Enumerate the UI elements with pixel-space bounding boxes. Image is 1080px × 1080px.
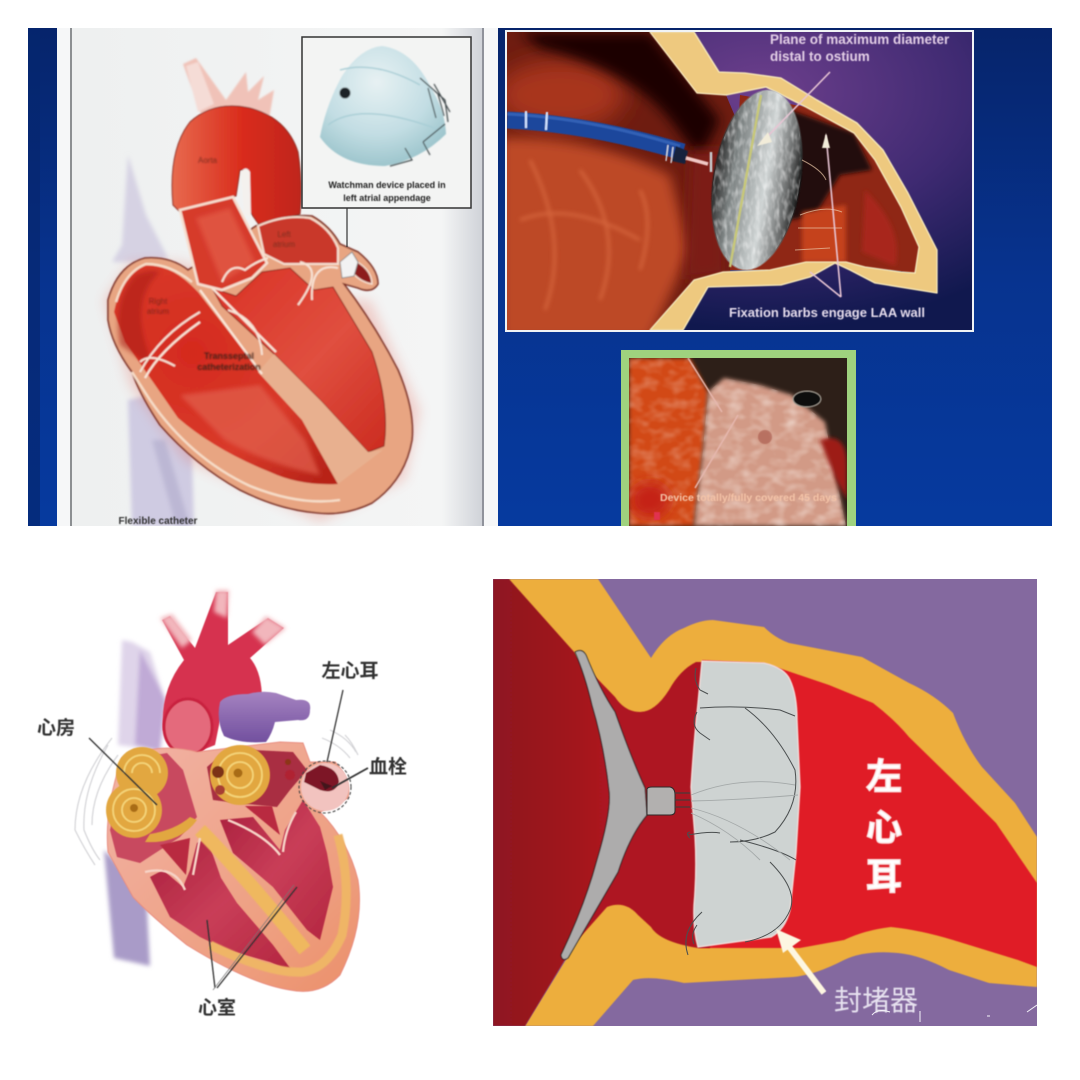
aorta and branches (160, 590, 286, 755)
left atrium (258, 217, 338, 264)
label: left appendage: 耳 (866, 856, 902, 897)
delivery catheter (507, 111, 711, 172)
left ventricle (220, 800, 333, 940)
caption: device placement (328, 180, 446, 203)
white frame (505, 30, 974, 332)
dark red atrial shadow (118, 271, 160, 365)
labels inside heart: atrium (273, 240, 295, 249)
left atrial appendage with thrombus (299, 761, 351, 813)
centre scar (758, 430, 772, 444)
labels inside heart: atrium (147, 307, 169, 316)
label: atrium: 心房 (37, 717, 75, 739)
labels inside heart: catheterization (197, 362, 261, 372)
ventricle highlight (180, 385, 320, 475)
appendage cavity (730, 95, 919, 273)
dark red valve tissue (160, 806, 280, 875)
heart wall (108, 216, 412, 514)
highlight on pulmonary artery (196, 208, 255, 282)
atrial tissue (507, 32, 734, 330)
aorta opening (164, 699, 212, 755)
label: left appendage: 左 (866, 756, 902, 797)
label: plane of maximum diameter: Plane of maximum diameter (770, 32, 950, 47)
brick glow upper left (495, 60, 625, 130)
septum pale edges (145, 284, 276, 378)
red tissue on right (820, 438, 847, 500)
right atrium blood swirls (106, 747, 197, 842)
panel paper background (57, 28, 498, 526)
dark region behind device (790, 110, 872, 220)
icon: blue occluder dome (320, 46, 450, 166)
label: thrombus: 血栓 (369, 756, 407, 778)
panel: Watchman device anatomy illustration (57, 28, 498, 527)
purple background (493, 579, 1037, 1026)
orange lower wall (500, 138, 690, 340)
black cavity (793, 391, 821, 407)
top blue slide background (28, 28, 1052, 526)
device hub (647, 787, 675, 815)
labels inside heart: Transseptal (204, 351, 254, 361)
arrowheads (757, 132, 830, 148)
caption: device placement: Watchman device placed in (328, 180, 446, 190)
right heart chambers (114, 265, 338, 484)
label: plane of maximum diameter: distal to ostium (770, 49, 870, 64)
yellow wall (509, 579, 1037, 1026)
device body (691, 661, 800, 947)
vena cava (104, 640, 166, 966)
illustration: red glow around heart (104, 262, 420, 522)
hub prongs (675, 793, 690, 807)
label: fixation barbs: Fixation barbs engage LAA wall (729, 305, 925, 320)
arrows (762, 72, 841, 297)
outer wall yellow band (210, 835, 346, 972)
dark red atrium (493, 579, 609, 1026)
orange myocardium (629, 358, 708, 526)
black shadow sweep (520, 32, 720, 160)
label: ventricle: 心室 (198, 996, 236, 1019)
pale wall of appendage (650, 32, 937, 330)
illustration: heart cross-section (108, 58, 412, 514)
leader lines (89, 690, 368, 990)
left atrium (207, 750, 307, 807)
pink endothelialised device (694, 378, 846, 526)
pulmonary artery box (180, 197, 267, 290)
red lobe of appendage (862, 190, 897, 266)
lighter streaks on tissue (520, 160, 648, 310)
orange mottling (629, 358, 708, 526)
background: purple pericardial space (650, 32, 972, 330)
photo caption: Device totally/fully covered 45 days (660, 492, 837, 504)
red spot (654, 512, 660, 520)
valves (140, 258, 338, 372)
pointer lines (688, 358, 738, 488)
septum yellow band (200, 830, 305, 950)
slit between aorta and artery (241, 168, 251, 216)
septum (258, 354, 383, 484)
labels inside heart: Aorta (198, 156, 218, 165)
right atrium (110, 753, 197, 863)
device disc (561, 651, 647, 959)
labels inside heart: Left (277, 230, 291, 239)
aortic arch (172, 106, 301, 226)
left atrium blood swirl (210, 745, 295, 805)
occluder body (699, 83, 815, 277)
device wires (686, 668, 796, 955)
inset: Watchman device (302, 37, 471, 247)
outer wall pale rim (116, 264, 340, 501)
red tissue lower left (630, 482, 670, 518)
device fine strands (691, 782, 798, 860)
occluder inside appendage (340, 252, 358, 278)
label: left atrial appendage: 左心耳 (321, 660, 379, 682)
pale tissue mottling (694, 378, 846, 526)
left ventricle (212, 268, 386, 452)
labels inside heart (147, 156, 295, 372)
heart body (107, 742, 360, 991)
right ventricle (150, 838, 293, 972)
illustration: vena cava behind heart (112, 155, 194, 526)
label: left appendage: 心 (866, 807, 902, 848)
shadow near device (685, 150, 725, 280)
panel: magnified device in appendage (495, 30, 974, 340)
panel: pathology photo with green frame (621, 350, 856, 526)
caption: device placement: left atrial appendage (343, 193, 431, 203)
bright red appendage cavity (698, 660, 1037, 967)
great vessels (182, 58, 274, 116)
appendage cavity (354, 262, 374, 286)
valves (145, 812, 296, 890)
fixation barbs (795, 160, 842, 250)
nerve lines (75, 730, 358, 865)
panel: occluder schematic (493, 579, 1037, 1026)
watermark specks (872, 1005, 1037, 1022)
dark red neck (560, 640, 710, 960)
leader line (346, 208, 348, 247)
pulmonary artery (219, 692, 310, 742)
labels inside heart: Right (149, 297, 168, 306)
label: occluder: 封堵器 (834, 985, 918, 1016)
orange glow in cavity (802, 205, 846, 262)
panel: labelled heart with thrombus (37, 590, 407, 1019)
label: plane of maximum diameter (770, 32, 950, 64)
arrow to occluder (776, 929, 824, 993)
label: left appendage (866, 756, 902, 897)
caption: flexible catheter: Flexible catheter (119, 516, 198, 527)
plane of maximum diameter line (730, 95, 761, 267)
